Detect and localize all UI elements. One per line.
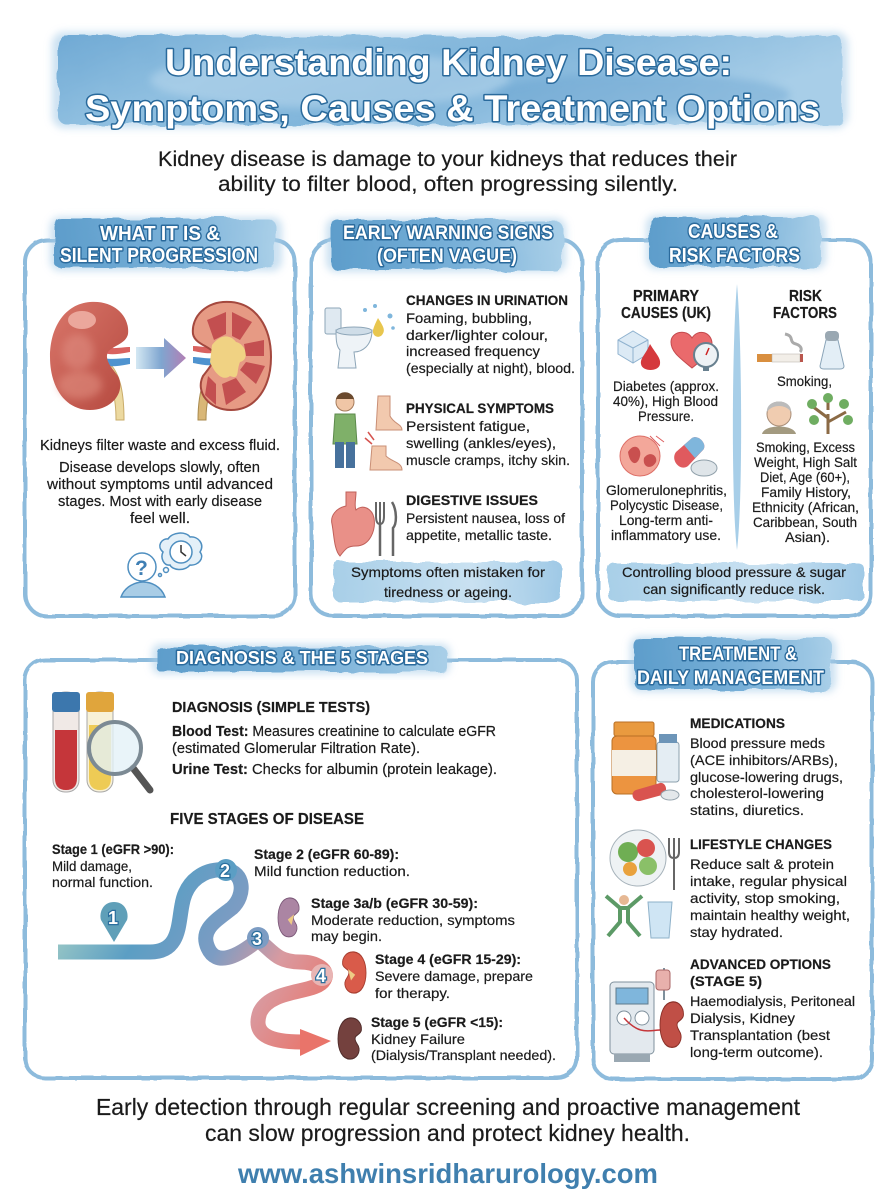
heading: diagnosis and stages: DIAGNOSIS & THE 5 STAGES (176, 648, 428, 668)
divider between columns (733, 284, 741, 550)
icon: heart and gauge (671, 332, 718, 371)
title banner (52, 32, 848, 129)
text: risk factors heading: FACTORS (773, 305, 837, 322)
text: stage 3: may begin. (311, 928, 382, 944)
closing message: can slow progression and protect kidney health. (205, 1120, 690, 1146)
icon: toilet and drops (325, 304, 395, 368)
text: changes in urination: (especially at night), blood. (406, 360, 575, 376)
text: primary causes heading: PRIMARY (633, 288, 699, 305)
text: advanced options: long-term outcome). (690, 1044, 823, 1060)
text: risk factors heading (773, 288, 837, 322)
text: advanced options: Haemodialysis, Peritoneal (690, 993, 855, 1009)
text: advanced options: Dialysis, Kidney (690, 1010, 795, 1026)
text: stage 5: Kidney Failure (371, 1031, 465, 1047)
text: diagnosis tests: (estimated Glomerular Filtration Rate). (172, 741, 420, 757)
text: changes in urination: increased frequency (406, 343, 540, 359)
text: medications: cholesterol-lowering (690, 785, 824, 801)
panel: early warning signs (311, 218, 582, 616)
icon: older person (762, 402, 796, 434)
text: diabetes: Diabetes (approx. (613, 378, 719, 394)
callout: control blood pressure (608, 563, 864, 601)
text: lifestyle changes: Reduce salt & protein (690, 856, 834, 872)
text: medications (690, 715, 843, 818)
text: other causes: Polycystic Disease, (610, 497, 723, 513)
text: stage 4 (375, 951, 533, 1001)
text: kidney function: feel well. (130, 510, 190, 527)
text: stage 3: Stage 3a/b (eGFR 30-59): (311, 895, 478, 911)
heading: causes and risk factors: CAUSES & (688, 221, 778, 243)
text: stage 5: Stage 5 (eGFR <15): (371, 1014, 503, 1030)
icon: kidney stage 4 (343, 952, 366, 993)
marker: stage 4: 4 (316, 966, 326, 986)
text: lifestyle changes: maintain healthy weight, (690, 907, 850, 923)
text: stage 4: for therapy. (375, 985, 450, 1001)
callout: symptoms mistaken: tiredness or ageing. (384, 584, 512, 600)
text: lifestyle changes: intake, regular physical (690, 873, 847, 889)
heading: causes and risk factors: RISK FACTORS (669, 245, 800, 267)
icon: kidney stage 5 (338, 1018, 361, 1059)
text: stage 3 (311, 895, 515, 944)
text: physical symptoms: swelling (ankles/eyes), (406, 435, 556, 451)
closing message: Early detection through regular screening and proactive management (96, 1094, 801, 1120)
text: other causes (606, 482, 727, 543)
heading: diagnosis and stages (152, 644, 450, 674)
text: kidney function: Disease develops slowly, often (59, 459, 260, 476)
text: primary causes heading: CAUSES (UK) (621, 305, 711, 322)
text: risk factor list: Asian). (785, 529, 830, 545)
text: primary causes heading (621, 288, 711, 322)
callout: control blood pressure: can significantly reduce risk. (643, 581, 825, 597)
text: physical symptoms (406, 400, 570, 468)
callout: symptoms mistaken: Symptoms often mistaken for (351, 564, 545, 580)
text: risk factor list: Family History, (761, 484, 851, 500)
text: diagnosis tests: Urine Test: Checks for albumin (protein leakage). (172, 762, 497, 778)
text: advanced options: Transplantation (best (690, 1027, 830, 1043)
heading: treatment: TREATMENT & (679, 644, 797, 665)
text: digestive issues: appetite, metallic taste. (406, 527, 552, 543)
marker: stage 1: 1 (108, 908, 118, 928)
text: stage 1 (52, 841, 174, 890)
icon: sugar cube and blood drop (618, 331, 660, 370)
icon: salad plate and cutlery (610, 830, 679, 890)
text: stage 1: Mild damage, (52, 858, 132, 874)
text: stage 5 (371, 1014, 556, 1063)
text: kidney function (40, 437, 280, 527)
text: changes in urination: darker/lighter colour, (406, 327, 548, 343)
icon: person wondering (121, 533, 202, 597)
text: stage 3: Moderate reduction, symptoms (311, 912, 515, 928)
icon: test tubes and magnifier (52, 692, 150, 792)
text: stage 4: Severe damage, prepare (375, 968, 533, 984)
panel: diagnosis and stages (25, 644, 577, 1078)
text: five stages heading: FIVE STAGES OF DISEASE (170, 811, 364, 828)
callout: control blood pressure: Controlling blood pressure & sugar (622, 564, 846, 580)
text: lifestyle changes: activity, stop smoking, (690, 890, 840, 906)
text: advanced options: ADVANCED OPTIONS (690, 956, 831, 972)
icon: person wondering: ? (135, 557, 148, 580)
text: digestive issues: Persistent nausea, loss of (406, 510, 565, 526)
heading: what it is: WHAT IT IS & (100, 223, 220, 245)
text: diagnosis tests (172, 699, 497, 778)
text: lifestyle changes (690, 836, 850, 940)
marker: stage 1 (100, 902, 128, 942)
text: medications: glucose-lowering drugs, (690, 769, 843, 785)
title banner: Understanding Kidney Disease: (165, 42, 732, 83)
subtitle (158, 148, 737, 196)
text: risk factor list: Ethnicity (African, (752, 499, 859, 515)
marker: stage 2: 2 (220, 861, 230, 881)
text: digestive issues: DIGESTIVE ISSUES (406, 492, 538, 508)
text: medications: MEDICATIONS (690, 715, 785, 731)
panel: treatment (593, 636, 872, 1079)
icon: stomach and cutlery (332, 492, 396, 556)
text: lifestyle changes: LIFESTYLE CHANGES (690, 836, 832, 852)
text: risk factors heading: RISK (789, 288, 822, 305)
text: kidney function: Kidneys filter waste and excess fluid. (40, 437, 280, 454)
icon: diseased kidney (193, 302, 271, 420)
text: risk factor list: Caribbean, South (753, 514, 857, 530)
title banner: Symptoms, Causes & Treatment Options (85, 88, 820, 129)
marker: stage 4 (311, 964, 333, 986)
subtitle: ability to filter blood, often progressing silently. (218, 173, 678, 196)
text: physical symptoms: Persistent fatigue, (406, 418, 530, 434)
subtitle: Kidney disease is damage to your kidneys that reduces their (158, 148, 737, 171)
text: diagnosis tests: DIAGNOSIS (SIMPLE TESTS) (172, 699, 370, 716)
text: changes in urination (406, 292, 575, 376)
text: risk factor list: Smoking, Excess (756, 439, 855, 455)
text: other causes: Glomerulonephritis, (606, 482, 727, 498)
icon: medication bottles (612, 722, 679, 801)
heading: what it is: SILENT PROGRESSION (60, 245, 258, 267)
text: other causes: inflammatory use. (611, 527, 721, 543)
icon: cigarette and salt shaker (757, 331, 844, 369)
text: diabetes: Pressure. (638, 408, 694, 424)
text: physical symptoms: PHYSICAL SYMPTOMS (406, 400, 554, 416)
text: risk factor list (752, 439, 859, 545)
icon: yoga person and water glass (606, 895, 672, 938)
text: changes in urination: Foaming, bubbling, (406, 310, 532, 326)
icon: healthy kidney (50, 302, 130, 420)
text: stage 1: Stage 1 (eGFR >90): (52, 841, 174, 857)
text: changes in urination: CHANGES IN URINATION (406, 292, 568, 308)
panel: what it is and silent progression (25, 217, 295, 616)
heading: causes and risk factors (646, 215, 826, 269)
marker: stage 2 (215, 859, 237, 881)
callout: symptoms mistaken (334, 562, 562, 602)
text: other causes: Long-term anti- (619, 512, 713, 528)
text: medications: Blood pressure meds (690, 735, 825, 751)
text: medications: (ACE inhibitors/ARBs), (690, 752, 838, 768)
text: advanced options (690, 956, 855, 1060)
icon: family tree (807, 393, 853, 434)
icon: kidney stage 3 (278, 898, 299, 937)
icon: glomerulus (620, 436, 664, 476)
panel: causes and risk factors (598, 215, 871, 616)
text: smoking: Smoking, (777, 373, 832, 389)
website url: www.ashwinsridharurology.com (237, 1158, 658, 1189)
text: physical symptoms: muscle cramps, itchy skin. (406, 452, 570, 468)
text: lifestyle changes: stay hydrated. (690, 924, 783, 940)
marker: stage 3: 3 (252, 929, 262, 949)
text: stage 2 (254, 846, 410, 879)
heading: what it is (50, 217, 282, 271)
text: stage 2: Mild function reduction. (254, 863, 410, 879)
text: stage 5: (Dialysis/Transplant needed). (371, 1047, 556, 1063)
chart: stages road (58, 859, 333, 1056)
text: medications: statins, diuretics. (690, 802, 804, 818)
text: stage 1: normal function. (52, 874, 153, 890)
text: risk factor list: Diet, Age (60+), (760, 469, 850, 485)
text: digestive issues (406, 492, 565, 543)
marker: stage 3 (247, 927, 269, 949)
text: diabetes: 40%), High Blood (613, 393, 718, 409)
text: stage 2: Stage 2 (eGFR 60-89): (254, 846, 399, 862)
text: risk factor list: Weight, High Salt (754, 454, 857, 470)
icon: dialysis machine and kidney (610, 968, 683, 1062)
icon: capsule and tablet (674, 437, 717, 476)
heading: early warning signs: (OFTEN VAGUE) (377, 246, 517, 267)
text: diagnosis tests: Blood Test: Measures creatinine to calculate eGFR (172, 724, 496, 740)
text: diabetes (613, 378, 719, 424)
closing message (96, 1094, 801, 1146)
heading: early warning signs (326, 218, 566, 272)
heading: early warning signs: EARLY WARNING SIGNS (343, 223, 553, 244)
text: advanced options: (STAGE 5) (690, 973, 762, 989)
heading: treatment (630, 636, 836, 692)
text: kidney function: stages. Most with early disease (58, 493, 262, 510)
text: stage 4: Stage 4 (eGFR 15-29): (375, 951, 521, 967)
arrow: progression (136, 338, 186, 378)
icon: tired child and swollen feet (333, 392, 402, 470)
heading: treatment: DAILY MANAGEMENT (637, 668, 824, 689)
text: kidney function: without symptoms until advanced (46, 476, 273, 493)
